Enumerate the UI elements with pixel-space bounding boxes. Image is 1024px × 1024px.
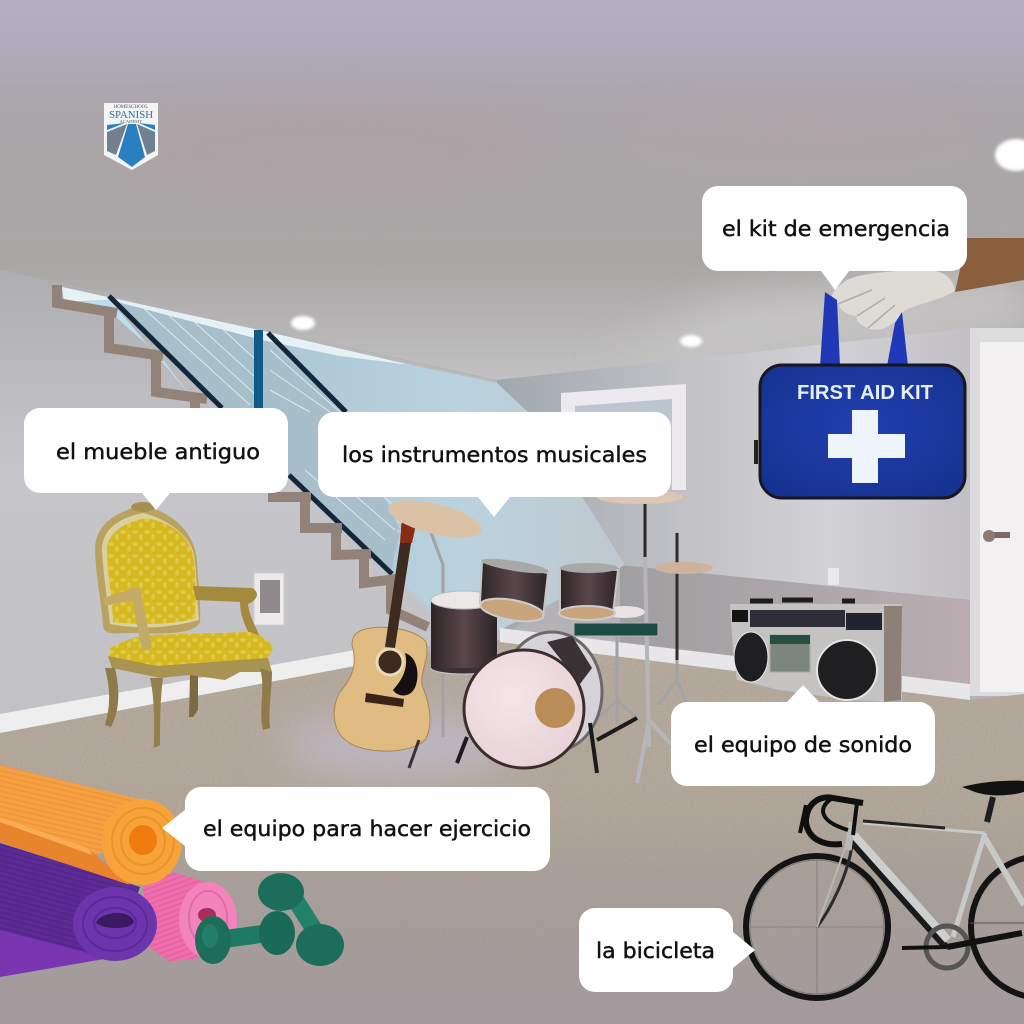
bass legs and pedal <box>457 718 637 773</box>
stairwell light <box>221 340 625 630</box>
door <box>970 328 1024 696</box>
fork <box>817 845 852 927</box>
floor tom <box>431 600 497 668</box>
bag <box>760 365 965 498</box>
pickguard <box>393 653 418 695</box>
kit label: FIRST AID KIT <box>797 382 933 404</box>
railing post <box>254 330 263 410</box>
front wheel <box>746 856 888 998</box>
rear wheel <box>971 856 1024 998</box>
frame tubes <box>851 841 945 946</box>
stands <box>430 530 690 737</box>
icon: boombox <box>730 600 902 702</box>
pink mat <box>143 872 237 962</box>
back legs <box>189 675 198 717</box>
icon: acoustic guitar <box>334 513 430 768</box>
callout: el mueble antiguo <box>24 408 288 510</box>
ceiling <box>0 0 1024 380</box>
callout: el equipo de sonido <box>671 685 935 786</box>
legs <box>105 668 118 727</box>
stairwell skylight strip <box>62 287 411 365</box>
window <box>561 384 686 490</box>
headstock <box>400 513 418 543</box>
callout: los instrumentos musicales: los instrumentos musicales <box>342 443 647 467</box>
chair back frame <box>95 505 200 634</box>
orange mat <box>0 765 182 885</box>
bass drum shell <box>502 632 602 752</box>
staircase upper <box>57 285 207 408</box>
logo: Spanish Academy shield: ACADEMY <box>120 119 143 124</box>
right arm <box>193 586 262 642</box>
side panel <box>884 606 902 702</box>
icon: bicycle <box>746 781 1024 998</box>
chair back upholstery <box>107 518 196 624</box>
callout: la bicicleta <box>579 908 755 992</box>
callout: el equipo para hacer ejercicio <box>162 787 550 871</box>
tuner strip <box>732 610 748 622</box>
logo: Spanish Academy shield <box>104 103 158 170</box>
bass drum patch <box>535 688 575 728</box>
saddle <box>962 781 1024 795</box>
crank arms <box>902 947 947 948</box>
callout: el mueble antiguo: el mueble antiguo <box>56 440 260 464</box>
callout: el kit de emergencia <box>702 186 967 290</box>
floor <box>0 640 1024 1024</box>
callout: los instrumentos musicales <box>318 412 671 517</box>
upright dumbbell <box>258 873 344 966</box>
callout: el kit de emergencia: el kit de emergencia <box>722 217 950 241</box>
left arm <box>104 588 152 650</box>
icon: hand holding kit <box>832 238 1024 330</box>
body <box>334 627 430 751</box>
icon: yoga mats <box>0 765 237 977</box>
callout: el equipo para hacer ejercicio: el equipo para hacer ejercicio <box>203 817 531 841</box>
icon: antique armchair <box>95 502 273 748</box>
left speaker <box>734 632 768 682</box>
right speaker <box>817 640 877 700</box>
seat post <box>987 797 993 822</box>
railing cables <box>140 305 405 555</box>
callout: la bicicleta: la bicicleta <box>596 939 715 963</box>
icon: dumbbells <box>195 873 344 966</box>
chainring <box>926 926 968 968</box>
heating vent <box>254 573 284 625</box>
handlebar <box>806 797 863 844</box>
cymbals <box>385 493 485 545</box>
handles <box>820 292 840 366</box>
staircase lower <box>268 497 428 627</box>
seat <box>110 632 273 667</box>
flat dumbbell <box>195 911 295 964</box>
icon: drum kit <box>385 490 713 783</box>
ceiling lights <box>291 316 315 330</box>
right rack tom <box>560 567 618 613</box>
purple mat <box>0 843 157 977</box>
buttons <box>750 600 855 601</box>
logo: Spanish Academy shield: SPANISH <box>109 110 153 121</box>
icon: first aid kit <box>754 292 965 498</box>
floor shadow <box>280 715 520 775</box>
left wall <box>0 270 500 715</box>
arm <box>955 238 1024 292</box>
sound hole <box>377 649 403 675</box>
left rack tom <box>480 562 548 618</box>
baseboards <box>0 650 355 733</box>
bass drum head <box>464 650 584 768</box>
cassette deck <box>770 635 810 672</box>
snare <box>574 623 658 636</box>
callout: el equipo de sonido: el equipo de sonido <box>694 733 912 757</box>
neck <box>385 543 411 648</box>
bridge <box>365 693 404 707</box>
white cross <box>828 410 905 483</box>
seat apron <box>108 656 272 680</box>
logo: Spanish Academy shield: HOMESCHOOL <box>114 105 148 110</box>
glove <box>832 270 955 330</box>
back wall <box>497 328 972 640</box>
